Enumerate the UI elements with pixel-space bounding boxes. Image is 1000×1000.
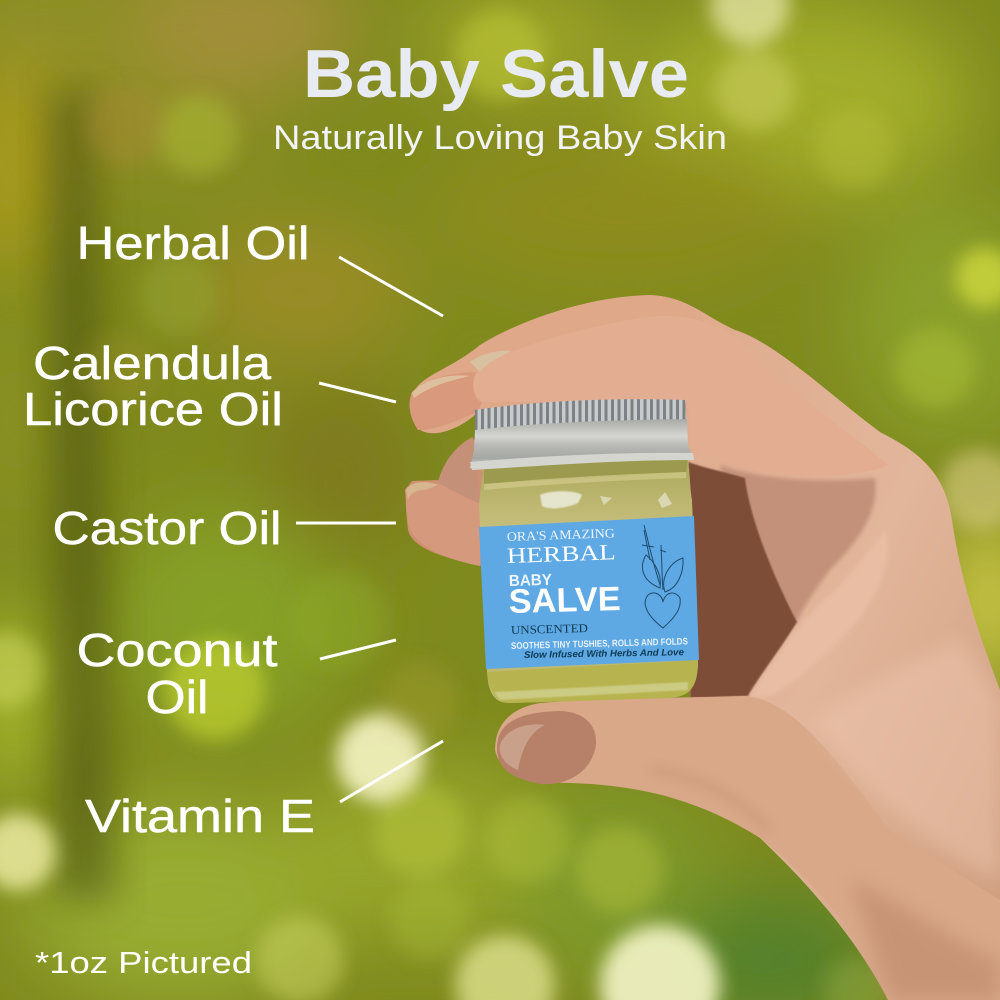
jar of baby salve: Slow Infused With Herbs And Love: [524, 647, 685, 661]
title: Baby Salve: [303, 36, 689, 112]
jar of baby salve: SOOTHES TINY TUSHIES, ROLLS AND FOLDS: [511, 636, 688, 652]
finger: middle finger pressing cap: [473, 316, 888, 475]
hand: fold of mid-tone skin above palm: [720, 465, 876, 625]
label: plant illustration: [642, 525, 683, 628]
finger: index finger over cap: [410, 295, 740, 433]
hand holding jar: [405, 295, 1000, 1000]
product label: [479, 516, 699, 669]
thumb: [495, 696, 1000, 1000]
thumbnail: [497, 711, 596, 784]
subtitle: Naturally Loving Baby Skin: [273, 119, 727, 157]
hand: dark hollow between fingers and thumb: [688, 462, 797, 698]
ingredient label: Herbal Oil: [76, 217, 443, 316]
metal lid: [470, 399, 694, 470]
ingredient label: Coconut Oil: Coconut: [76, 624, 278, 676]
ingredient label: Calendula Licorice Oil: Licorice Oil: [23, 383, 283, 435]
hand: wrist and knuckle shading: [810, 640, 1000, 880]
ingredient label: Vitamin E: Vitamin E: [85, 790, 315, 842]
label: brand: ORA'S AMAZING: [507, 525, 615, 544]
finger: lower fingers left of jar: [406, 438, 500, 566]
ingredient label: Calendula Licorice Oil: [23, 337, 396, 435]
jar of baby salve: SALVE: [508, 580, 621, 621]
jar of baby salve: UNSCENTED: [511, 621, 588, 637]
ingredient label: Coconut Oil: [76, 624, 396, 723]
ingredient label: Herbal Oil: Herbal Oil: [76, 217, 310, 269]
glass jar body with balm: [479, 458, 698, 703]
hand: back of hand and wrist: [660, 296, 1000, 1000]
ingredient label: Calendula Licorice Oil: Calendula: [33, 337, 271, 389]
background: dark blurred tree trunk: [50, 90, 115, 900]
jar of baby salve: [470, 399, 699, 703]
footnote: *1oz Pictured: [35, 945, 252, 980]
label: product name: BABY: [509, 572, 552, 590]
ingredient label: Vitamin E: [85, 741, 443, 842]
hand: pink palm fold: [750, 530, 888, 698]
ingredient label: Coconut Oil: Oil: [146, 671, 208, 723]
ingredient label: Castor Oil: Castor Oil: [52, 502, 282, 554]
jar of baby salve: HERBAL: [506, 539, 616, 568]
